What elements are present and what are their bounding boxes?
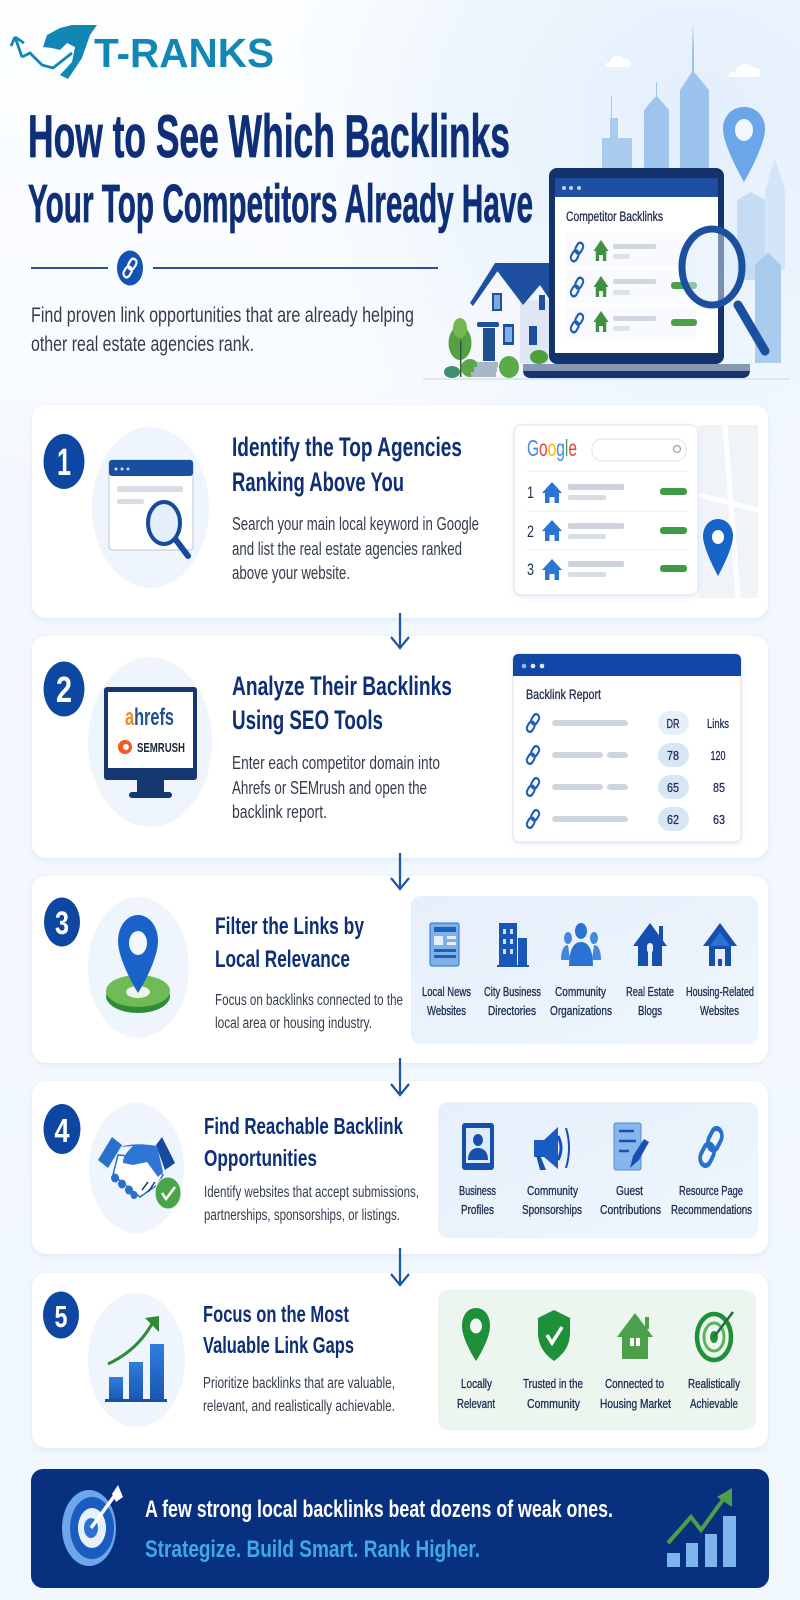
category labels: Websites xyxy=(700,1004,739,1018)
icon: green pin xyxy=(462,1308,490,1361)
heading: Using SEO Tools xyxy=(232,705,383,735)
category labels: Real Estate xyxy=(626,985,674,999)
step number 3: 3 xyxy=(55,905,69,941)
icon: newspaper xyxy=(430,923,459,966)
heading xyxy=(215,913,364,973)
icon: community people xyxy=(561,923,601,966)
arrow 4 to 5 xyxy=(391,1248,409,1285)
opportunity labels xyxy=(459,1184,752,1217)
footer banner xyxy=(31,1469,769,1588)
row 3 xyxy=(566,307,697,340)
quality labels xyxy=(457,1377,741,1411)
Google results mockup: 2 xyxy=(527,522,534,541)
quality labels: Realistically xyxy=(688,1377,741,1391)
opportunity labels: Sponsorships xyxy=(522,1203,582,1217)
backlink report table: 85 xyxy=(713,781,725,795)
step 1 panel xyxy=(32,405,768,618)
backlink report table: Links xyxy=(707,717,729,731)
opportunity labels: Business xyxy=(459,1184,496,1198)
icon: city buildings xyxy=(497,923,529,967)
body text: Prioritize backlinks that are valuable, xyxy=(203,1375,395,1392)
step number 2 xyxy=(44,662,84,716)
body text: and list the real estate agencies ranked xyxy=(232,539,462,559)
backlink report table: 120 xyxy=(710,749,726,763)
heading xyxy=(204,1113,403,1171)
Google results mockup: 1 xyxy=(527,483,534,502)
subtitle: other real estate agencies rank. xyxy=(31,333,254,356)
category labels: City Business xyxy=(484,985,541,999)
body text: Search your main local keyword in Google xyxy=(232,514,479,534)
step number 5: 5 xyxy=(54,1299,68,1334)
quality labels: Trusted in the xyxy=(523,1377,583,1391)
footer text: Strategize. Build Smart. Rank Higher. xyxy=(145,1536,480,1563)
illustration: city skyline xyxy=(602,23,785,363)
heading xyxy=(232,671,452,735)
category labels: Local News xyxy=(422,985,471,999)
category labels: Websites xyxy=(427,1004,466,1018)
category labels: Housing-Related xyxy=(686,985,754,999)
heading: Opportunities xyxy=(204,1145,317,1171)
subtitle xyxy=(31,304,414,356)
heading: Valuable Link Gaps xyxy=(203,1332,354,1358)
heading: Local Relevance xyxy=(215,946,350,973)
icon: handshake with check xyxy=(89,1103,184,1233)
step number 5 xyxy=(43,1292,79,1338)
panel: valuable link qualities xyxy=(438,1290,756,1430)
backlink report table: 62 xyxy=(667,813,679,827)
opportunity labels: Profiles xyxy=(461,1203,494,1217)
opportunity labels: Guest xyxy=(616,1184,643,1198)
row 1 xyxy=(566,233,696,267)
icon: megaphone xyxy=(534,1127,569,1170)
step number 4 xyxy=(44,1104,80,1154)
logo: T-RANKS: T-RANKS xyxy=(94,30,274,76)
step 5 panel xyxy=(32,1273,768,1448)
subtitle: Find proven link opportunities that are already helping xyxy=(31,304,414,327)
icon: green house xyxy=(617,1313,653,1359)
body text: above your website. xyxy=(232,563,350,583)
backlink report table xyxy=(513,654,741,842)
body text: local area or housing industry. xyxy=(215,1015,372,1032)
icon: housing house xyxy=(703,923,737,966)
quality labels: Relevant xyxy=(457,1397,495,1411)
heading: Focus on the Most xyxy=(203,1301,349,1327)
body text: relevant, and realistically achievable. xyxy=(203,1398,395,1415)
illustration: laptop with competitor backlinks xyxy=(523,168,765,378)
heading xyxy=(203,1301,354,1358)
body text: Enter each competitor domain into xyxy=(232,753,440,773)
step number 2: 2 xyxy=(56,669,72,710)
heading: Find Reachable Backlink xyxy=(204,1113,403,1139)
divider with link icon xyxy=(31,250,438,286)
heading: Identify the Top Agencies xyxy=(232,432,462,462)
backlink report table: Backlink Report xyxy=(526,686,601,702)
body text xyxy=(232,514,479,583)
heading: Analyze Their Backlinks xyxy=(232,671,452,701)
icon: guest contribution document xyxy=(614,1123,649,1170)
body text: Focus on backlinks connected to the xyxy=(215,992,403,1009)
body text: partnerships, sponsorships, or listings. xyxy=(204,1207,400,1224)
step number 4: 4 xyxy=(54,1112,70,1149)
Google results mockup: 3 xyxy=(527,560,534,579)
body text: Ahrefs or SEMrush and open the xyxy=(232,778,427,798)
opportunity labels: Contributions xyxy=(600,1203,661,1217)
step number 3 xyxy=(44,898,80,946)
backlink report table: 78 xyxy=(667,749,679,763)
icon: monitor with tools: SEMRUSH xyxy=(137,740,185,755)
category labels xyxy=(422,985,754,1018)
illustration: laptop with competitor backlinks: Competitor Backlinks xyxy=(566,209,663,224)
step 2 panel xyxy=(32,636,768,858)
category labels: Organizations xyxy=(550,1004,612,1018)
icon: green target xyxy=(697,1312,733,1360)
opportunity labels: Recommendations xyxy=(671,1203,752,1217)
arrow 1 to 2 xyxy=(391,613,409,648)
body text xyxy=(215,992,403,1032)
footer text xyxy=(145,1496,613,1563)
magnifier xyxy=(682,229,765,351)
backlink report table: DR xyxy=(666,717,680,731)
category labels: Community xyxy=(555,985,607,999)
logo: T-RANKS xyxy=(11,25,274,79)
icon: real estate blog house xyxy=(633,923,667,966)
category labels: Blogs xyxy=(638,1004,662,1018)
step number 1 xyxy=(44,434,84,489)
arrow 2 to 3 xyxy=(391,853,409,889)
Google results mockup: Google xyxy=(527,435,577,461)
title xyxy=(28,103,533,234)
step 3 panel xyxy=(32,876,768,1063)
body text xyxy=(204,1184,419,1224)
heading xyxy=(232,432,462,497)
icon: browser search xyxy=(92,427,209,588)
panel: reachable opportunities xyxy=(438,1102,758,1238)
step 4 panel xyxy=(32,1081,768,1254)
body text: Identify websites that accept submissions, xyxy=(204,1184,419,1201)
row 2 xyxy=(566,270,697,303)
icon: resource link xyxy=(698,1125,724,1169)
quality labels: Locally xyxy=(461,1377,493,1391)
Google results mockup xyxy=(514,425,758,598)
icon: target with arrow xyxy=(62,1485,123,1566)
arrow 3 to 4 xyxy=(391,1058,409,1095)
icon: green shield with check xyxy=(538,1310,570,1361)
body text: backlink report. xyxy=(232,802,327,822)
opportunity labels: Community xyxy=(527,1184,579,1198)
icon: monitor with tools: ahrefs xyxy=(125,704,174,731)
backlink report table: 63 xyxy=(713,813,725,827)
backlink report table: 65 xyxy=(667,781,679,795)
icon: rising bar chart xyxy=(667,1488,736,1567)
step number 1: 1 xyxy=(57,442,71,484)
icon: map pin on green disc xyxy=(88,897,189,1038)
quality labels: Connected to xyxy=(605,1377,664,1391)
icon: business profile xyxy=(462,1123,494,1170)
icon: monitor with tools xyxy=(88,657,212,827)
panel: local relevance categories xyxy=(411,896,758,1044)
body text xyxy=(203,1375,395,1415)
body text xyxy=(232,753,440,822)
heading: Ranking Above You xyxy=(232,467,404,497)
illustration: house xyxy=(423,263,790,379)
opportunity labels: Resource Page xyxy=(679,1184,743,1198)
footer text: A few strong local backlinks beat dozens of weak ones. xyxy=(145,1496,613,1523)
category labels: Directories xyxy=(488,1004,536,1018)
quality labels: Community xyxy=(527,1397,581,1411)
quality labels: Achievable xyxy=(690,1397,738,1411)
heading: Filter the Links by xyxy=(215,913,364,940)
quality labels: Housing Market xyxy=(600,1397,671,1411)
icon: growth chart xyxy=(88,1293,185,1427)
